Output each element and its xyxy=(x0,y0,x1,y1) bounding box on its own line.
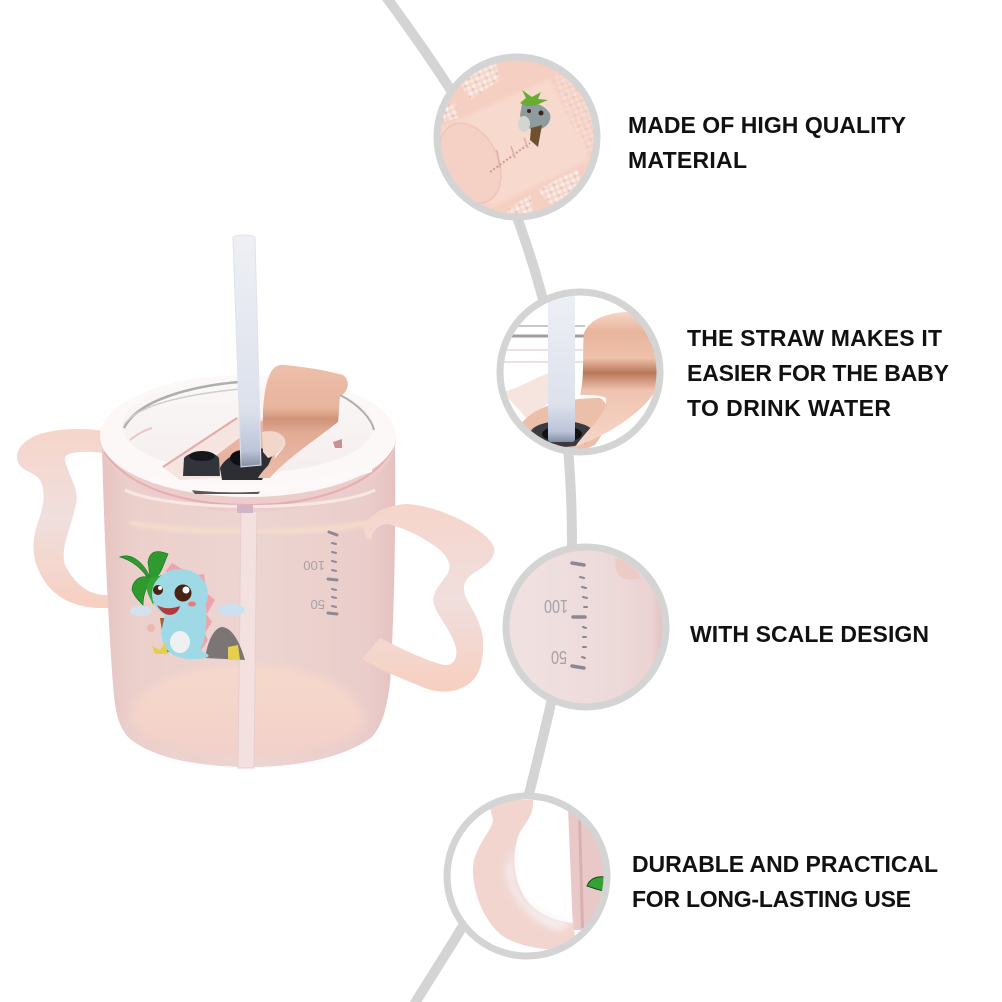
cheek xyxy=(188,602,196,606)
straw xyxy=(233,235,261,467)
mini dino xyxy=(520,102,550,130)
label 100: 100 xyxy=(544,596,568,616)
text: scale: WITH SCALE DESIGN xyxy=(690,621,929,647)
lid opening xyxy=(163,417,263,480)
scale marks xyxy=(328,532,337,614)
front lip dark gap xyxy=(188,486,262,494)
right handle xyxy=(362,504,494,692)
product photo: straw cup xyxy=(17,235,494,768)
lid xyxy=(100,375,396,513)
cup base tint xyxy=(131,666,364,756)
label 50: 50 xyxy=(551,647,567,667)
text: durable: DURABLE AND PRACTICAL xyxy=(632,851,938,877)
text: straw: THE STRAW MAKES IT xyxy=(687,325,942,351)
text: material: MATERIAL xyxy=(628,147,747,173)
callout circle 1: material xyxy=(434,54,600,220)
callout circle 2: straw xyxy=(495,290,665,460)
cup body xyxy=(102,445,395,767)
black nozzle xyxy=(183,452,220,476)
text: durable: FOR LONG-LASTING USE xyxy=(632,886,911,912)
spikes xyxy=(165,563,215,652)
text: straw: EASIER FOR THE BABY xyxy=(687,360,949,386)
text: straw: TO DRINK WATER xyxy=(687,395,891,421)
scale ticks xyxy=(572,563,587,668)
flower xyxy=(147,624,155,632)
text: material xyxy=(628,112,906,173)
palm leaves xyxy=(120,552,168,605)
text: durable xyxy=(632,851,938,912)
scale label 50: 50 xyxy=(311,597,325,612)
rotated cup xyxy=(440,78,590,208)
left handle xyxy=(17,429,108,608)
purple mark xyxy=(237,505,253,513)
grass xyxy=(152,643,240,660)
text: material: MADE OF HIGH QUALITY xyxy=(628,112,906,138)
eyes xyxy=(174,584,192,602)
tab oval hole xyxy=(262,431,285,458)
foam beads xyxy=(442,64,594,214)
lid front lip xyxy=(148,465,372,492)
scale marks xyxy=(490,143,530,172)
scale label 100: 100 xyxy=(303,558,325,573)
callout circle 4: handle xyxy=(440,790,615,965)
small pink lid mark xyxy=(333,439,342,448)
text: straw xyxy=(687,325,949,421)
cup upper tint arc xyxy=(130,522,372,532)
dino head xyxy=(152,569,208,619)
inner straw xyxy=(238,505,257,768)
callout circle 3: scale xyxy=(500,540,675,715)
dino body xyxy=(162,600,209,659)
palm trunk xyxy=(160,618,172,652)
connecting curved line xyxy=(384,0,572,1002)
lid tab and pad xyxy=(258,365,348,478)
rock xyxy=(205,627,245,660)
dinosaur sticker xyxy=(120,552,245,660)
clouds xyxy=(130,606,152,616)
mouth xyxy=(157,605,180,615)
belly xyxy=(170,631,190,653)
